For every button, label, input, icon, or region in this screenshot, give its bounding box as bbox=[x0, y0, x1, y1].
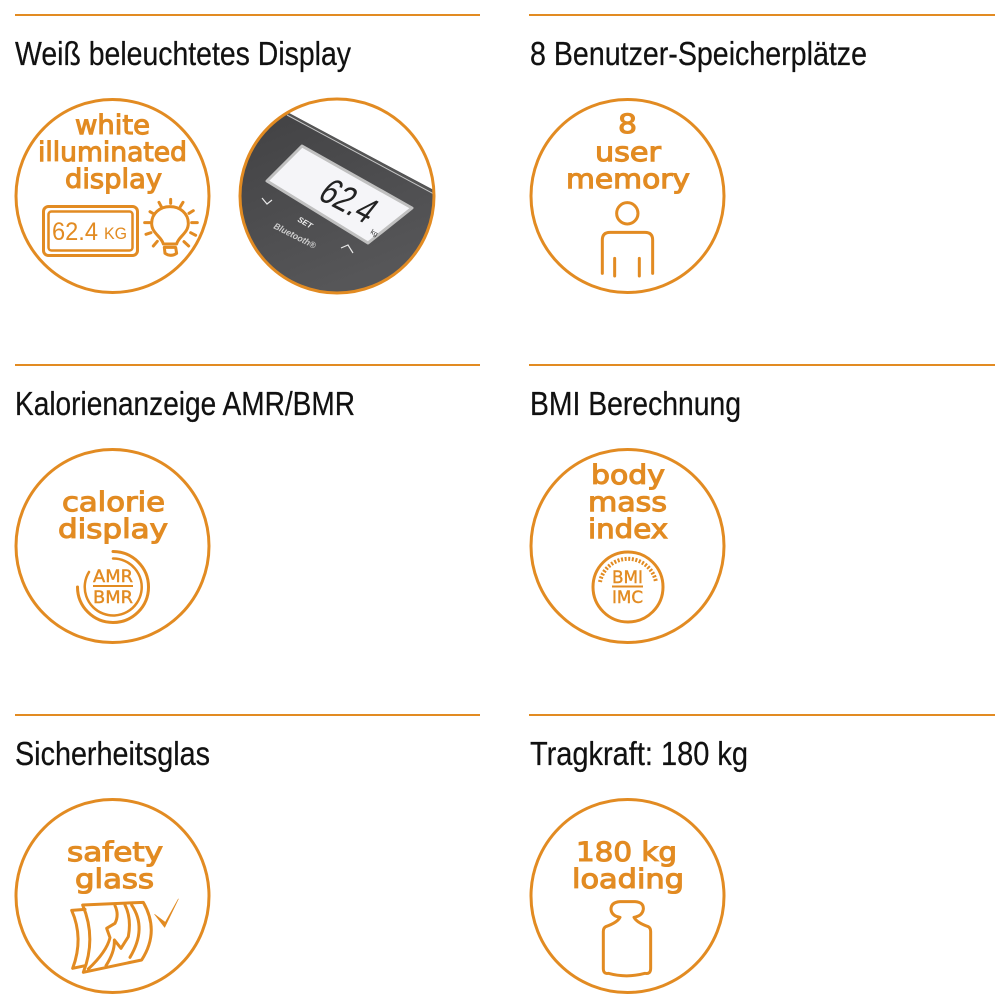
icon: safety glass badge: glass bbox=[75, 864, 154, 895]
icon: calorie display badge bbox=[16, 450, 209, 642]
icon: body mass index badge: mass bbox=[588, 487, 667, 518]
icon: white illuminated display badge: KG bbox=[104, 224, 127, 243]
image: scale display photo: SET bbox=[296, 215, 315, 231]
image: scale display photo: Bluetooth® bbox=[272, 221, 318, 251]
icon: light bulb bbox=[145, 199, 197, 255]
icon: BMI gauge: IMC bbox=[612, 588, 643, 608]
heading: user memory: 8 Benutzer-Speicherplätze bbox=[530, 35, 867, 72]
icon: safety glass badge: safety bbox=[67, 837, 163, 868]
icon: white illuminated display badge: white bbox=[75, 110, 150, 141]
icon: user memory badge bbox=[531, 100, 724, 292]
icon: 180 kg loading badge: 180 kg bbox=[576, 837, 677, 868]
heading: calorie display: Kalorienanzeige AMR/BMR bbox=[15, 385, 355, 422]
heading: display: Weiß beleuchtetes Display bbox=[15, 35, 351, 72]
heading: body mass index: BMI Berechnung bbox=[530, 385, 741, 422]
panel: user memory bbox=[529, 14, 995, 292]
icon: white illuminated display badge: 62.4 bbox=[52, 218, 98, 246]
panel: calorie display bbox=[15, 364, 480, 642]
icon: glass sheets with check bbox=[72, 899, 178, 972]
icon: white illuminated display badge: display bbox=[65, 164, 162, 195]
icon: AMR/BMR dial bbox=[78, 552, 148, 622]
image: scale display photo: kg bbox=[369, 229, 379, 238]
icon: AMR/BMR dial: BMR bbox=[93, 588, 133, 608]
heading: loading: Tragkraft: 180 kg bbox=[530, 735, 748, 772]
heading: safety glass: Sicherheitsglas bbox=[15, 735, 210, 772]
icon: body mass index badge bbox=[531, 450, 724, 642]
icon: AMR/BMR dial: AMR bbox=[93, 567, 133, 587]
icon: BMI gauge bbox=[593, 552, 663, 622]
icon: calorie display badge: display bbox=[58, 514, 168, 545]
icon: body mass index badge: index bbox=[588, 514, 668, 545]
icon: user memory badge: user bbox=[595, 137, 662, 168]
image: scale display photo bbox=[238, 98, 445, 294]
panel: 180 kg loading bbox=[529, 714, 995, 992]
icon: body mass index badge: body bbox=[591, 460, 665, 491]
panel: body mass index bbox=[529, 364, 995, 642]
icon: white illuminated display badge: illuminated bbox=[38, 137, 187, 168]
icon: user memory badge: memory bbox=[566, 164, 690, 195]
icon: white illuminated display badge bbox=[16, 100, 209, 292]
icon: calorie display badge: calorie bbox=[62, 487, 165, 518]
icon: safety glass badge bbox=[16, 800, 209, 992]
icon: BMI gauge: BMI bbox=[612, 568, 643, 588]
scale reading: 62.4 bbox=[311, 171, 387, 231]
icon: user memory badge: 8 bbox=[618, 109, 637, 140]
icon: 180 kg loading badge bbox=[531, 800, 724, 992]
panel: white illuminated display bbox=[15, 14, 480, 294]
icon: 180 kg loading badge: loading bbox=[572, 864, 684, 895]
icon: weight bbox=[603, 902, 651, 976]
panel: safety glass bbox=[15, 714, 480, 992]
icon: person bbox=[602, 203, 653, 276]
